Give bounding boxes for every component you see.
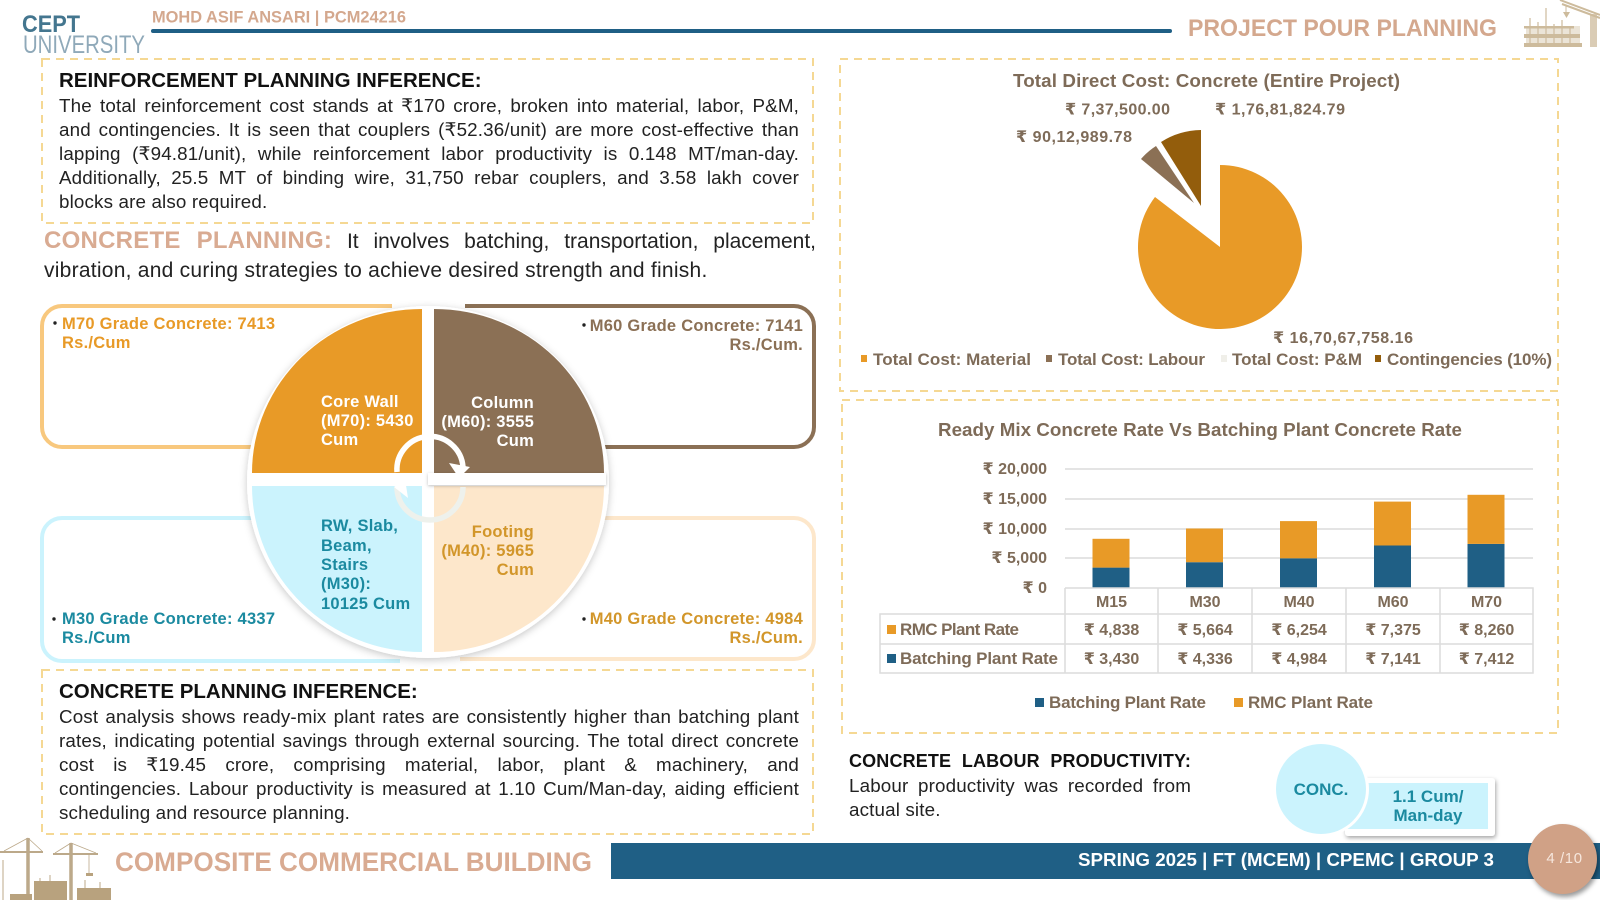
quadrant: footing: (M40): 5965 [441, 542, 534, 560]
callout: M70 rate: M70 Grade Concrete: 7413 [62, 315, 275, 333]
legend [861, 350, 1552, 369]
footer title: composite commercial building: COMPOSITE COMMERCIAL BUILDING [115, 847, 592, 877]
legend: Batching Plant Rate [1049, 693, 1206, 712]
quadrant: column: Column [471, 394, 534, 412]
legend: Total Cost: Labour [1058, 350, 1205, 369]
divider shadow bar [428, 473, 606, 485]
quadrant: column: (M60): 3555 [441, 413, 534, 431]
data table: RMC Plant Rate [900, 620, 1019, 639]
panel: concrete planning inference [41, 669, 814, 835]
data table [880, 588, 1533, 673]
data table: M60 [1377, 594, 1409, 611]
text: reinforcement summary: and contingencies. It is seen that couplers (₹52.36/unit) are more cost-effective than [59, 119, 799, 140]
kpi: concrete labour productivity: 1.1 Cum/ [1393, 787, 1464, 806]
data labels: ₹ 7,37,500.00 [1065, 102, 1170, 118]
y axis labels: ₹ 10,000 [982, 521, 1047, 538]
quadrant: column [434, 309, 604, 473]
data table: ₹ 4,984 [1271, 651, 1327, 668]
data labels: ₹ 1,76,81,824.79 [1215, 102, 1345, 118]
quadrant: core wall: (M70): 5430 [321, 412, 414, 430]
quadrant: core wall: Cum [321, 431, 358, 449]
footer bar [611, 843, 1600, 879]
data table: ₹ 4,838 [1084, 622, 1139, 639]
y axis labels: ₹ 15,000 [982, 491, 1047, 508]
icon: cycle arrows [394, 436, 470, 520]
text: concrete labour productivity: Labour productivity was recorded from [849, 775, 1191, 796]
callout: M30 rate [42, 518, 400, 661]
data table: ₹ 6,254 [1271, 622, 1327, 639]
text: concrete labour productivity: actual site. [849, 799, 941, 820]
legend: Contingencies (10%) [1387, 350, 1552, 369]
text: concrete planning intro [44, 227, 816, 282]
gridlines [1065, 469, 1533, 558]
callout: M60 rate [465, 306, 814, 447]
text: concrete planning intro: vibration, and curing strategies to achieve desired strength and finish. [44, 259, 708, 282]
footer text: semester and group: SPRING 2025 | FT (MCEM) | CPEMC | GROUP 3 [1078, 849, 1494, 870]
data labels: ₹ 16,70,67,758.16 [1273, 330, 1413, 347]
panel: ready mix vs batching plant rate chart [841, 399, 1559, 734]
callout: M60 rate: Rs./Cum. [729, 336, 803, 354]
logo: CEPT University [22, 11, 145, 59]
legend [1035, 693, 1373, 712]
quadrant: footing: Cum [497, 561, 534, 579]
callout: M70 rate [42, 306, 392, 447]
diagram: concrete quantities and rates by grade [40, 304, 816, 664]
data table: ₹ 3,430 [1084, 651, 1139, 668]
data table: M15 [1096, 594, 1127, 611]
kpi: concrete labour productivity: CONC. [1294, 780, 1348, 799]
header rule [151, 29, 1172, 33]
stacked bars [1092, 495, 1504, 588]
callout: M60 rate: M60 Grade Concrete: 7141 [590, 317, 803, 335]
heading: reinforcement planning inference: REINFORCEMENT PLANNING INFERENCE: [59, 69, 482, 92]
page number badge [1528, 824, 1597, 894]
callout: M70 rate: Rs./Cum [62, 334, 131, 352]
data table: ₹ 7,375 [1365, 622, 1421, 639]
text: reinforcement summary: lapping (₹94.81/unit), while reinforcement labor productivity is 0.148 MT/man-day. [59, 143, 799, 164]
data labels: ₹ 90,12,989.78 [1016, 129, 1132, 146]
callout: M40 rate [460, 518, 814, 659]
header: author name: MOHD ASIF ANSARI | PCM24216 [152, 8, 406, 26]
y axis labels: ₹ 20,000 [982, 461, 1047, 478]
data table: Batching Plant Rate [900, 649, 1058, 668]
text: concrete summary [59, 706, 799, 823]
callout: M40 rate: Rs./Cum. [729, 629, 803, 647]
text: concrete planning intro: CONCRETE PLANNING: It involves batching, transportation, placement, [44, 227, 816, 254]
logo: CEPT University: CEPT [22, 11, 80, 38]
data labels [1016, 102, 1413, 347]
pie chart [1138, 130, 1302, 329]
text: concrete summary: Cost analysis shows ready-mix plant rates are consistently higher than batching plant [59, 706, 799, 727]
data table: ₹ 7,412 [1459, 651, 1514, 668]
text: reinforcement summary [59, 95, 799, 212]
data table: ₹ 7,141 [1365, 651, 1421, 668]
y axis labels: ₹ 5,000 [991, 550, 1047, 567]
data table: ₹ 8,260 [1459, 622, 1514, 639]
text: concrete summary: cost is ₹19.45 crore, comprising material, labor, plant & machinery, and [59, 754, 799, 775]
quadrant: footing: Footing [472, 523, 534, 541]
chart title: Ready Mix Concrete Rate Vs Batching Plant Concrete Rate [938, 419, 1462, 440]
logo: CEPT University: UNIVERSITY [23, 31, 145, 59]
quadrant: RW, slab, beam, stairs: RW, Slab, [321, 517, 398, 535]
page number badge: 4 /10 [1546, 850, 1583, 867]
callout: M40 rate: M40 Grade Concrete: 4984 [590, 610, 804, 628]
quadrant: core wall [252, 309, 422, 473]
text: concrete summary: contingencies. Labour productivity is measured at 1.10 Cum/Man-day, aiding efficient [59, 778, 799, 799]
legend: Total Cost: P&M [1232, 350, 1362, 369]
data table: M70 [1471, 594, 1502, 611]
y axis labels: ₹ 0 [1023, 580, 1047, 597]
text: reinforcement summary: Additionally, 25.5 MT of binding wire, 31,750 rebar couplers, and 3.58 lakh cover [59, 167, 799, 188]
kpi: concrete labour productivity [1276, 744, 1499, 841]
quadrant: column: Cum [497, 432, 534, 450]
header: project pour planning: PROJECT POUR PLANNING [1188, 15, 1497, 42]
quadrant: footing [434, 486, 604, 652]
y axis labels [982, 461, 1047, 597]
chart title: Total Direct Cost: Concrete (Entire Project) [1013, 70, 1400, 91]
text: concrete summary: rates, indicating potential savings through external sourcing. The total direct concrete [59, 730, 799, 751]
icon: building under construction with crane [1524, 0, 1600, 47]
text: concrete summary: scheduling and resource planning. [59, 802, 350, 823]
quadrant: RW, slab, beam, stairs: Stairs [321, 556, 368, 574]
text: concrete labour productivity [849, 751, 1191, 820]
panel: total direct cost pie chart [839, 58, 1559, 392]
panel: reinforcement planning inference [41, 58, 814, 224]
text: reinforcement summary: blocks are also required. [59, 191, 267, 212]
callout: M30 rate: M30 Grade Concrete: 4337 [62, 610, 275, 628]
text: concrete labour productivity: CONCRETE LABOUR PRODUCTIVITY: [849, 751, 1191, 771]
quadrant: RW, slab, beam, stairs: Beam, [321, 537, 372, 555]
quadrant: RW, slab, beam, stairs: 10125 Cum [321, 595, 410, 613]
circle base [247, 306, 609, 658]
callout: M30 rate: Rs./Cum [62, 629, 131, 647]
quadrant: RW, slab, beam, stairs: (M30): [321, 575, 371, 593]
quadrant: RW, slab, beam, stairs [252, 486, 422, 652]
heading: concrete planning inference: CONCRETE PLANNING INFERENCE: [59, 680, 418, 703]
text: reinforcement summary: The total reinforcement cost stands at ₹170 crore, broken into material, labor, P&M, [59, 95, 799, 116]
data table: ₹ 4,336 [1177, 651, 1233, 668]
legend: Total Cost: Material [873, 350, 1031, 369]
quadrant: core wall: Core Wall [321, 393, 399, 411]
kpi: concrete labour productivity: Man-day [1394, 806, 1463, 825]
legend: RMC Plant Rate [1248, 693, 1373, 712]
icon: cranes and city skyline [0, 838, 111, 900]
data table: M40 [1283, 594, 1315, 611]
data table: M30 [1189, 594, 1221, 611]
data table: ₹ 5,664 [1177, 622, 1233, 639]
